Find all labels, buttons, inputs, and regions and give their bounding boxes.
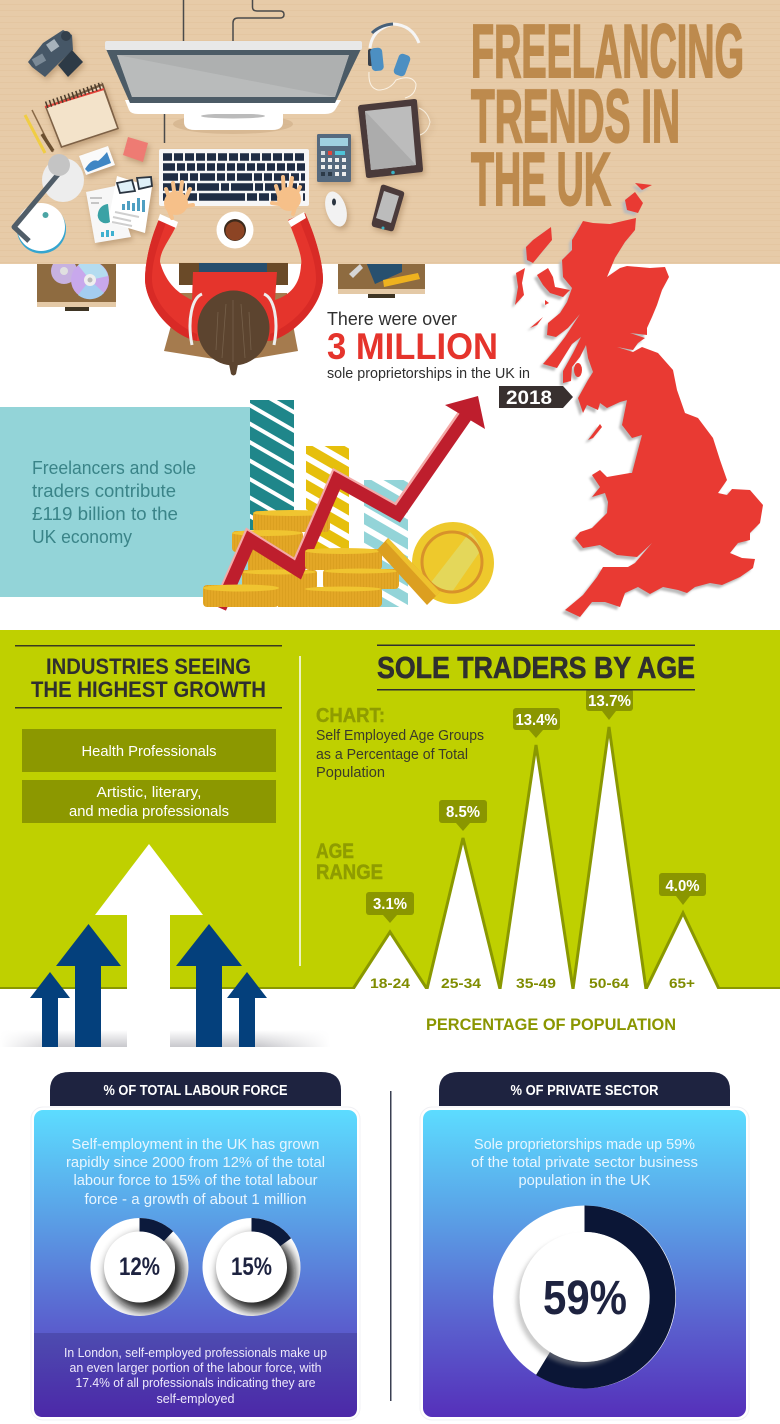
heading: sole traders by age: SOLE TRADERS BY AGE [377,650,695,685]
chart description: Self Employed Age Groups [316,727,484,744]
age range labels: 18-24 [370,976,411,991]
icon: desk lamp [14,154,84,254]
desk header panel [0,0,780,264]
Orkney [625,192,643,213]
donut 12% [90,1218,188,1316]
age chart: 4.0% [666,878,700,895]
chart description: as a Percentage of Total [316,746,468,763]
description text: of the total private sector business [471,1154,698,1171]
head [198,290,270,376]
donut 15% [202,1218,300,1316]
London note: an even larger portion of the labour force, with [70,1360,322,1375]
drawer: CDs [37,264,116,311]
UK map [515,183,763,617]
person at desk [145,212,323,376]
icon: headphones [368,24,419,98]
icon: pencils [25,110,53,153]
title [471,9,744,221]
tab heading: % OF PRIVATE SECTOR [510,1083,659,1099]
panel: % of total labour force [31,1072,360,1420]
London note: In London, self-employed professionals make up [64,1345,327,1360]
tab heading [50,1072,341,1106]
icon: computer mouse [321,189,351,229]
Isle of Man [588,424,602,440]
icon: small chart photo [79,146,115,175]
panel: economy contribution: traders contribute [32,481,176,501]
icon: coffee cup [216,212,254,248]
drawer: cards and USB [338,262,425,298]
Tiree [530,317,543,328]
mainland Great Britain [543,218,763,617]
industry: artistic, literary and media: Artistic, literary, [96,785,202,801]
callouts [366,689,706,923]
Shetland [635,183,652,190]
icon: camera [28,30,83,77]
callout: 3 million sole proprietorships: sole proprietorships in the UK in [327,366,530,382]
panel: green section [0,630,780,988]
big coin [412,522,494,604]
description text: rapidly since 2000 from 12% of the total [66,1154,325,1171]
description text [66,1136,325,1208]
donut 59%: 59% [543,1272,627,1325]
London note: 17.4% of all professionals indicating they are [76,1375,316,1390]
industry: artistic, literary and media [22,780,276,823]
icon: documents and glasses [86,176,152,243]
heading: industries: INDUSTRIES SEEING [46,654,251,679]
headphones on neck [190,294,276,345]
description text: Sole proprietorships made up 59% [474,1136,695,1153]
panel: economy contribution: UK economy [32,527,132,547]
industry: health professionals: Health Professionals [82,744,216,760]
description text: Self-employment in the UK has grown [72,1136,320,1153]
red growth arrow [219,396,485,608]
callout: 3 million sole proprietorships: There were over [327,308,457,329]
title: THE UK [471,137,611,221]
heading: industries [15,645,282,708]
industry: artistic, literary and media: and media professionals [69,804,229,820]
panel: % of private sector [420,1072,749,1420]
icon: sticky note [123,137,148,162]
age range labels: 50-64 [589,976,630,991]
tab heading [439,1072,730,1106]
donut 12%: 12% [119,1253,160,1281]
industry: health professionals [22,729,276,772]
age range label: RANGE [316,861,383,884]
panel: economy contribution: Freelancers and sole [32,458,196,478]
divider [390,1091,392,1401]
age range label [316,840,383,884]
coin stacks behind arrow [232,510,330,589]
panel: economy contribution [0,407,250,597]
London note [64,1345,327,1406]
chart baseline and peaks [0,727,780,997]
Skye [537,268,570,297]
age range labels: 25-34 [441,976,482,991]
donut 15%: 15% [231,1253,272,1281]
age range labels [370,976,695,991]
callout: 3 million sole proprietorships [327,308,573,409]
age chart [0,689,780,997]
chart description: CHART: [316,705,385,727]
panel: economy contribution: £119 billion to the [32,504,178,524]
Outer Hebrides [526,227,552,263]
rising arrows [0,844,330,1047]
age chart: 8.5% [446,804,480,821]
description text: labour force to 15% of the total labour [74,1172,318,1189]
Arran [574,363,582,377]
tab heading: % OF TOTAL LABOUR FORCE [104,1083,288,1099]
cuffs [158,214,178,228]
chart description [316,705,484,781]
age range label: AGE [316,840,354,863]
axis label: PERCENTAGE OF POPULATION [426,1015,676,1034]
year tag [499,386,573,409]
icon: tablet [358,99,430,178]
computer monitor [105,0,362,143]
age range labels: 65+ [669,976,695,991]
striped bars [250,400,408,607]
age chart: 3.1% [373,896,407,913]
age chart: 13.7% [588,693,631,710]
illustration: rising bars, coins and arrow [203,396,494,608]
heading: industries: THE HIGHEST GROWTH [31,677,266,702]
ground shadow [0,1030,330,1047]
description text [471,1136,698,1189]
coin stacks in front [203,538,440,607]
year tag: 2018 [506,388,552,409]
icon: calculator [317,134,351,182]
chart description: Population [316,764,385,781]
age chart: 13.4% [516,712,558,729]
age range labels: 35-49 [516,976,556,991]
callout: 3 million sole proprietorships: 3 MILLION [327,326,498,367]
red sweater [145,213,323,341]
icon: smartphone [372,185,404,231]
computer keyboard [159,149,309,206]
description text: force - a growth of about 1 million [84,1191,306,1208]
donut 59% [493,1206,676,1388]
description text: population in the UK [518,1172,650,1189]
London note: self-employed [156,1391,234,1406]
icon: notebook [45,83,119,148]
hands [164,177,301,218]
chair [164,263,298,362]
